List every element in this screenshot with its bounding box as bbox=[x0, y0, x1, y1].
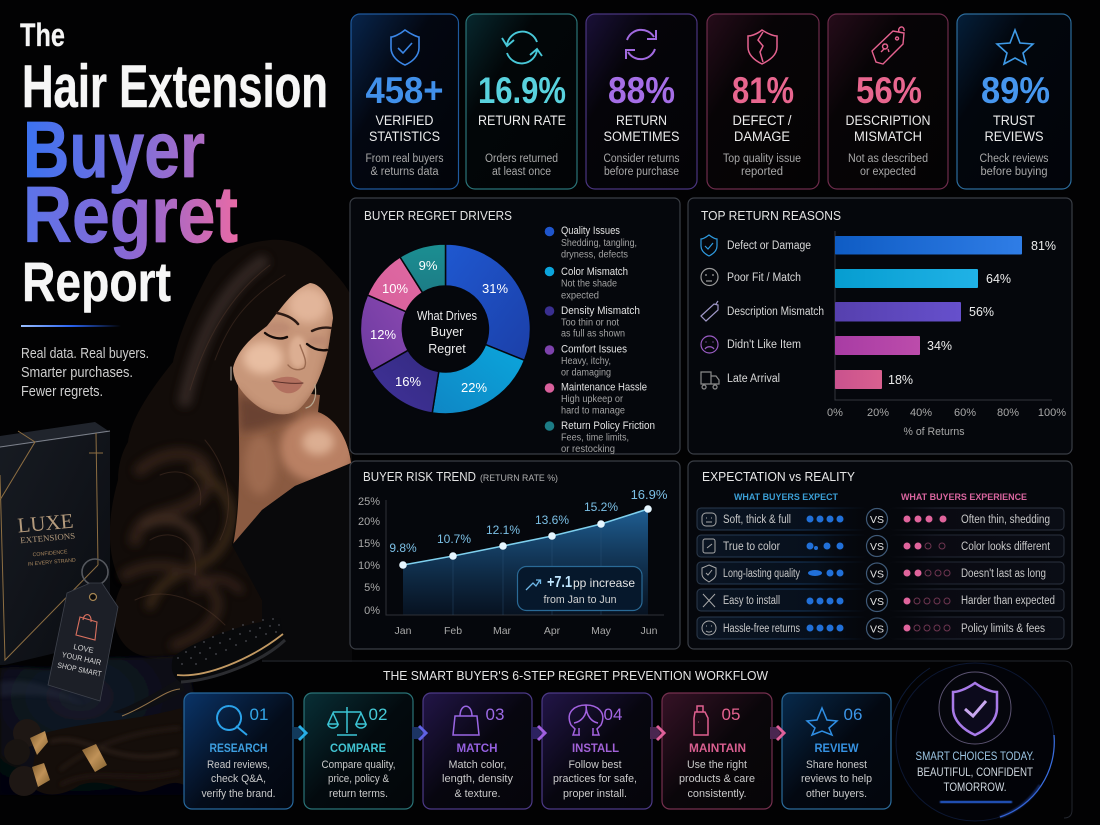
line chart: 13.6% bbox=[535, 513, 569, 527]
icon: price tag bbox=[872, 27, 904, 64]
column headings: WHAT BUYERS EXPERIENCE bbox=[901, 492, 1027, 503]
box logo: IN EVERY STRAND bbox=[28, 558, 76, 568]
legend bbox=[545, 225, 655, 455]
heading: BUYER REGRET DRIVERS bbox=[364, 209, 512, 223]
label: DAMAGE bbox=[734, 129, 790, 144]
callout: +7.1pp increase: from Jan to Jun bbox=[544, 594, 616, 606]
step 4: install: Follow best bbox=[568, 759, 622, 771]
box logo: LUXE bbox=[16, 509, 74, 537]
legend: Quality Issues bbox=[561, 225, 620, 237]
line chart: 0% bbox=[364, 605, 380, 617]
legend: Density Mismatch bbox=[561, 305, 640, 317]
legend: Shedding, tangling, bbox=[561, 238, 637, 249]
stat card: description mismatch bbox=[828, 14, 948, 189]
experience labels bbox=[961, 514, 1055, 635]
description bbox=[980, 153, 1049, 178]
description: before purchase bbox=[604, 166, 679, 178]
column headings bbox=[734, 492, 1027, 503]
title: Regret bbox=[23, 170, 238, 259]
panel: top return reasons bbox=[688, 198, 1072, 454]
donut values: 12% bbox=[370, 327, 396, 342]
step 3: match: length, density bbox=[442, 773, 513, 785]
expectation labels: Easy to install bbox=[723, 595, 780, 607]
description: before buying bbox=[980, 166, 1048, 178]
line chart bbox=[358, 487, 668, 637]
tagline: Fewer regrets. bbox=[21, 383, 103, 400]
heading: (RETURN RATE %) bbox=[480, 473, 558, 484]
tag text: LOVE bbox=[73, 642, 94, 655]
donut center label: What Drives bbox=[417, 309, 477, 323]
bar chart: 20% bbox=[867, 407, 889, 419]
legend: expected bbox=[561, 290, 599, 302]
line chart: 20% bbox=[358, 516, 380, 528]
legend: Color Mismatch bbox=[561, 266, 628, 278]
description bbox=[604, 153, 680, 178]
legend: Return Policy Friction bbox=[561, 420, 655, 432]
step 2: compare: price, policy & bbox=[328, 773, 390, 785]
step 4: install: INSTALL bbox=[572, 741, 619, 755]
bar chart: 40% bbox=[910, 407, 932, 419]
step 1: research bbox=[184, 693, 293, 809]
icon: head profiles bbox=[569, 705, 603, 735]
icon: cycle arrows bbox=[502, 32, 542, 63]
hair mass bbox=[110, 240, 352, 662]
panel: 6-step workflow bbox=[184, 661, 1072, 821]
tag text: SHOP SMART bbox=[57, 660, 103, 679]
hair highlights bbox=[125, 262, 262, 645]
panel: buyer risk trend bbox=[350, 461, 680, 649]
legend: Maintenance Hassle bbox=[561, 382, 647, 394]
bar chart: 34% bbox=[927, 339, 952, 353]
label: VERIFIED bbox=[376, 113, 434, 128]
reason labels: Description Mismatch bbox=[727, 306, 824, 318]
heading bbox=[363, 470, 558, 484]
legend: Fees, time limits, bbox=[561, 432, 629, 444]
label: TRUST bbox=[993, 113, 1035, 128]
bar chart: 56% bbox=[969, 305, 994, 319]
value: 89% bbox=[981, 70, 1050, 111]
step 5: maintain: 05 bbox=[722, 705, 740, 724]
expectation labels: Long-lasting quality bbox=[723, 568, 800, 580]
description: Consider returns bbox=[604, 153, 680, 165]
description bbox=[366, 153, 444, 178]
title: Buyer bbox=[23, 105, 205, 194]
step 2: compare bbox=[304, 693, 413, 809]
step 6: review: 06 bbox=[844, 705, 862, 724]
expectation dots bbox=[806, 516, 844, 632]
row icons bbox=[702, 513, 716, 635]
experience labels: Doesn't last as long bbox=[961, 568, 1046, 580]
icon: star bbox=[997, 30, 1033, 64]
label: DEFECT / bbox=[732, 113, 792, 128]
tag text: YOUR HAIR bbox=[61, 650, 102, 667]
reason labels: Defect or Damage bbox=[727, 240, 811, 252]
label: RETURN RATE bbox=[478, 113, 566, 128]
donut center label: Regret bbox=[428, 342, 466, 356]
step 6: review: reviews to help bbox=[801, 773, 872, 785]
tagline bbox=[21, 345, 149, 400]
expectation labels: Soft, thick & full bbox=[723, 514, 791, 526]
bar chart: 100% bbox=[1038, 407, 1066, 419]
value: 16.9% bbox=[478, 70, 566, 111]
bar chart: 80% bbox=[997, 407, 1019, 419]
bar chart: 0% bbox=[827, 407, 843, 419]
donut values: 10% bbox=[382, 281, 408, 296]
icon: shield check bbox=[939, 672, 1011, 744]
hang tag: love your hair bbox=[48, 559, 118, 701]
description bbox=[485, 153, 558, 178]
reason labels: Poor Fit / Match bbox=[727, 272, 801, 284]
label: DESCRIPTION bbox=[846, 113, 930, 128]
bar chart bbox=[827, 231, 1066, 438]
donut values: 16% bbox=[395, 374, 421, 389]
closing message bbox=[916, 751, 1034, 794]
stat card: defect / damage bbox=[707, 14, 819, 189]
callout: +7.1pp increase: pp increase bbox=[573, 576, 635, 590]
legend: Heavy, itchy, bbox=[561, 356, 611, 367]
panel: expectation vs reality bbox=[688, 461, 1072, 649]
closing message: SMART CHOICES TODAY. bbox=[916, 751, 1034, 763]
step 5: maintain: products & care bbox=[679, 773, 755, 785]
title: The bbox=[20, 17, 65, 53]
icon: tag bag bbox=[76, 615, 97, 640]
bar chart: 64% bbox=[986, 272, 1011, 286]
donut values: 9% bbox=[419, 258, 438, 273]
black dress bbox=[232, 463, 352, 662]
icon: shopping bag bbox=[453, 706, 479, 735]
experience labels: Harder than expected bbox=[961, 595, 1055, 607]
step 1: research: check Q&A, bbox=[211, 773, 266, 785]
line chart: 12.1% bbox=[486, 523, 520, 537]
illustration: model with long wavy hair bbox=[110, 240, 356, 662]
step 6: review bbox=[782, 693, 891, 809]
comparison rows: VS bbox=[870, 596, 884, 608]
step 4: install: proper install. bbox=[563, 788, 627, 800]
step 3: match: MATCH bbox=[456, 741, 498, 755]
donut values: 31% bbox=[482, 281, 508, 296]
reason icons bbox=[701, 235, 719, 389]
icon: cracked shield bbox=[748, 30, 777, 64]
donut chart bbox=[360, 244, 530, 414]
step 4: install: 04 bbox=[604, 705, 622, 724]
step 3: match: & texture. bbox=[454, 788, 500, 800]
hair brush bbox=[113, 618, 285, 716]
line chart: Feb bbox=[444, 625, 462, 637]
workflow heading: THE SMART BUYER'S 6-STEP REGRET PREVENTION WORKFLOW bbox=[383, 669, 768, 683]
description: Not as described bbox=[848, 153, 928, 165]
value: 56% bbox=[856, 70, 922, 111]
closing message: TOMORROW. bbox=[944, 782, 1006, 794]
line chart: 10% bbox=[358, 560, 380, 572]
stat card: return rate bbox=[466, 14, 577, 189]
comparison rows: VS bbox=[870, 624, 884, 636]
description: Orders returned bbox=[485, 153, 558, 165]
box logo: CONFIDENCE bbox=[32, 549, 68, 558]
description: or expected bbox=[860, 166, 916, 178]
experience labels: Policy limits & fees bbox=[961, 623, 1045, 635]
heading: BUYER RISK TREND bbox=[363, 470, 476, 484]
experience labels: Color looks different bbox=[961, 541, 1051, 553]
value: 458+ bbox=[366, 70, 444, 111]
legend: or damaging bbox=[561, 368, 611, 378]
callout: +7.1pp increase bbox=[518, 566, 642, 610]
comparison rows bbox=[697, 508, 1064, 639]
stat card: verified statistics bbox=[351, 14, 458, 189]
title: Hair Extension bbox=[22, 53, 328, 120]
closing message: BEAUTIFUL, CONFIDENT bbox=[917, 767, 1033, 779]
legend: Comfort Issues bbox=[561, 344, 627, 356]
line chart: 9.8% bbox=[389, 541, 417, 555]
donut values bbox=[370, 258, 508, 395]
title underline bbox=[21, 325, 121, 327]
satin fabric bbox=[0, 655, 200, 795]
step 2: compare: return terms. bbox=[329, 788, 388, 800]
line chart: Apr bbox=[544, 625, 561, 637]
step 3: match: 03 bbox=[486, 705, 504, 724]
icon: shield check bbox=[391, 30, 419, 65]
expectation labels bbox=[723, 514, 800, 635]
legend: hard to manage bbox=[561, 406, 625, 416]
donut values: 22% bbox=[461, 380, 487, 395]
step 5: maintain bbox=[662, 693, 772, 809]
step 3: match: Match color, bbox=[448, 759, 506, 771]
panel: buyer regret drivers bbox=[350, 198, 680, 455]
donut center label bbox=[417, 309, 477, 356]
stat card: return sometimes bbox=[586, 14, 697, 189]
value: 81% bbox=[732, 70, 794, 111]
step 6: review: other buyers. bbox=[806, 788, 867, 800]
line chart: Mar bbox=[493, 625, 512, 637]
tagline: Smarter purchases. bbox=[21, 364, 133, 381]
label bbox=[846, 113, 930, 144]
comparison rows: VS bbox=[870, 568, 884, 580]
reason labels bbox=[727, 240, 824, 385]
legend: Not the shade bbox=[561, 278, 617, 290]
hair bundles bbox=[4, 708, 184, 796]
callout: +7.1pp increase: +7.1 bbox=[547, 574, 572, 591]
description bbox=[848, 153, 928, 178]
description bbox=[723, 153, 801, 178]
box logo: EXTENSIONS bbox=[20, 530, 76, 545]
description: Check reviews bbox=[980, 153, 1049, 165]
title: Report bbox=[22, 250, 171, 313]
step 4: install: practices for safe, bbox=[553, 773, 637, 785]
step 3: match bbox=[423, 693, 532, 809]
label: RETURN bbox=[616, 113, 667, 128]
icon: star bbox=[807, 708, 837, 735]
label: MISMATCH bbox=[854, 129, 922, 144]
step 5: maintain: MAINTAIN bbox=[689, 741, 746, 755]
expectation labels: Hassle-free returns bbox=[723, 623, 800, 635]
step 2: compare: 02 bbox=[369, 705, 387, 724]
legend: Too thin or not bbox=[561, 318, 619, 328]
step 5: maintain: consistently. bbox=[688, 788, 746, 800]
column headings: WHAT BUYERS EXPECT bbox=[734, 492, 838, 503]
label bbox=[732, 113, 792, 144]
step 6: review: Share honest bbox=[806, 759, 867, 771]
description: From real buyers bbox=[366, 153, 444, 165]
description: at least once bbox=[492, 166, 551, 178]
description: reported bbox=[741, 166, 783, 178]
legend: as full as shown bbox=[561, 328, 625, 340]
title bbox=[20, 17, 328, 313]
label bbox=[604, 113, 680, 144]
line chart: 25% bbox=[358, 496, 380, 508]
step 1: research: Read reviews, bbox=[207, 759, 270, 771]
legend: or restocking bbox=[561, 444, 615, 455]
line chart: 16.9% bbox=[631, 487, 668, 502]
icon: spray bottle bbox=[694, 706, 708, 735]
line chart: 15% bbox=[358, 538, 380, 550]
label bbox=[369, 113, 440, 144]
label bbox=[984, 113, 1044, 144]
donut center label: Buyer bbox=[431, 325, 463, 339]
product box: Luxe Extensions bbox=[0, 422, 110, 665]
bar chart: % of Returns bbox=[904, 426, 965, 438]
step 1: research: RESEARCH bbox=[210, 741, 268, 755]
icon: magnifier bbox=[217, 706, 247, 735]
description: & returns data bbox=[370, 166, 439, 178]
expectation labels: True to color bbox=[723, 541, 780, 553]
facial features bbox=[231, 313, 331, 408]
step 6: review: REVIEW bbox=[814, 741, 859, 755]
bar chart: 60% bbox=[954, 407, 976, 419]
step 1: research: verify the brand. bbox=[202, 788, 276, 800]
stat card: trust reviews bbox=[957, 14, 1071, 189]
line chart: 15.2% bbox=[584, 500, 618, 514]
icon: scales bbox=[328, 707, 366, 735]
step arrows bbox=[292, 726, 784, 740]
VS badges bbox=[866, 508, 888, 639]
icon: refresh arrows bbox=[626, 30, 656, 59]
tagline: Real data. Real buyers. bbox=[21, 345, 149, 362]
line chart: May bbox=[591, 625, 612, 637]
box logo bbox=[16, 509, 78, 568]
heading: EXPECTATION vs REALITY bbox=[702, 469, 855, 484]
legend: High upkeep or bbox=[561, 394, 624, 405]
step 1: research: 01 bbox=[250, 705, 268, 724]
step 2: compare: Compare quality, bbox=[322, 759, 396, 771]
reason labels: Late Arrival bbox=[727, 373, 780, 385]
step 5: maintain: Use the right bbox=[687, 759, 747, 771]
bar chart: 81% bbox=[1031, 239, 1056, 253]
label: STATISTICS bbox=[369, 129, 440, 144]
label: REVIEWS bbox=[984, 129, 1044, 144]
badge: smart choices bbox=[892, 663, 1054, 821]
experience labels: Often thin, shedding bbox=[961, 514, 1050, 526]
step 4: install bbox=[542, 693, 652, 809]
step 2: compare: COMPARE bbox=[330, 741, 386, 755]
line chart: 5% bbox=[364, 582, 380, 594]
comparison rows: VS bbox=[870, 541, 884, 553]
value: 88% bbox=[608, 70, 675, 111]
line chart: Jun bbox=[641, 625, 658, 637]
tag text bbox=[57, 642, 103, 679]
face bbox=[230, 283, 333, 414]
reason labels: Didn't Like Item bbox=[727, 339, 801, 351]
heading: TOP RETURN REASONS bbox=[701, 209, 841, 223]
legend: dryness, defects bbox=[561, 250, 628, 260]
shoulder and chest bbox=[233, 386, 351, 544]
experience dots bbox=[904, 516, 946, 632]
label: SOMETIMES bbox=[604, 129, 680, 144]
comparison rows: VS bbox=[870, 514, 884, 526]
description: Top quality issue bbox=[723, 153, 801, 165]
bar chart: 18% bbox=[888, 373, 913, 387]
line chart: 10.7% bbox=[437, 532, 471, 546]
icon: trend arrow bbox=[526, 580, 540, 590]
line chart: Jan bbox=[395, 625, 412, 637]
